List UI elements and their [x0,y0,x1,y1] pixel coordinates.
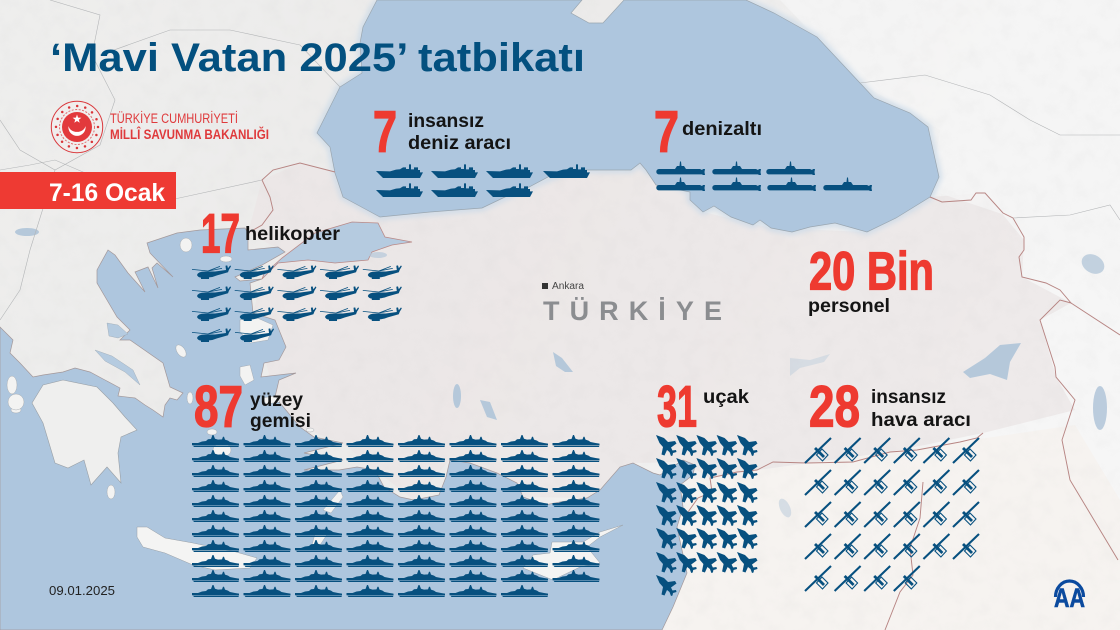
icons: fighter jets [656,435,758,596]
number: 7 [654,100,679,164]
label: personel [808,296,890,317]
date banner: 7-16 Ocak [49,179,165,207]
label: insansız [408,111,484,132]
label: hava aracı [871,410,971,431]
sea: Karadeniz [317,0,939,232]
region tint: Kafkasya [780,0,1120,300]
land: Mora [32,380,137,485]
date banner [0,172,176,209]
rivers and lakes [15,228,1108,519]
number: 87 [194,374,243,440]
political borders [248,163,1120,630]
date: 09.01.2025 [49,584,115,598]
capital marker: Ankara: Ankara [552,281,584,292]
label [871,387,971,431]
country label: TÜRKİYE [543,296,722,326]
panel: 87 yüzey gemisi [192,374,600,597]
number: 28 [809,374,860,440]
sea: Ege ve Akdeniz [0,228,695,630]
label: uçak [703,387,749,408]
panel: 17 helikopter [192,202,402,342]
title: ‘Mavi Vatan 2025’ tatbikatı [50,36,585,80]
icons: submarines [656,162,872,191]
label [250,390,311,432]
label [408,111,511,154]
ministry name: TÜRKİYE CUMHURİYETİ [110,111,238,126]
label: deniz aracı [408,133,511,154]
label: yüzey [250,390,303,411]
number: 20 Bin [809,242,934,302]
number: 31 [657,374,697,440]
region tint: Suriye ve Irak [665,425,1120,630]
sea: Marmara [262,222,412,279]
panel: 7 denizaltı [654,100,872,191]
ministry name [110,111,269,142]
number: 7 [373,100,397,164]
panel: 20 Bin personel [808,242,934,317]
land: adalar [7,238,343,548]
label: gemisi [250,411,311,432]
logo: Anadolu Ajansı: AA [1054,583,1085,613]
icons: unmanned sea vehicles [376,164,590,197]
sea: Evia ve Pagasitikos körfezi [95,323,140,385]
label: denizaltı [682,119,762,140]
icons: helicopters [192,265,402,342]
label: helikopter [245,224,341,245]
region tint: Türkiye [248,163,1075,500]
sea glow: coastal [317,0,939,232]
label: insansız [871,387,946,408]
panel: 31 uçak [656,374,758,596]
icons: drones [805,438,979,591]
emblem: Millî Savunma Bakanlığı [51,101,103,153]
number: 17 [201,202,240,264]
panel: 28 insansız hava aracı [805,374,979,591]
ministry name: MİLLÎ SAVUNMA BAKANLIĞI [110,127,269,142]
land: Kıbrıs [523,525,623,580]
icons: surface ships [192,435,600,597]
land: Girit [137,527,257,570]
panel: 7 insansız deniz aracı [373,100,590,197]
